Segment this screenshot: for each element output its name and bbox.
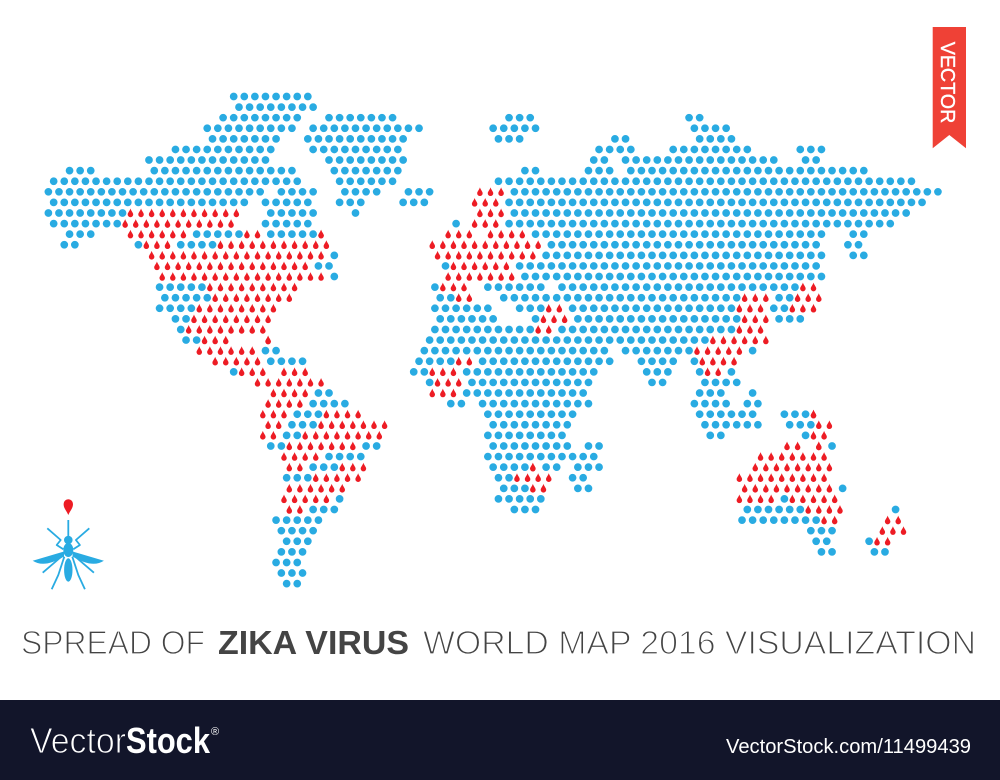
title: WORLD MAP 2016 VISUALIZATION [423,624,976,661]
landmass: Australia [739,414,844,552]
footer image id: VectorStock.com/11499439 [726,736,971,758]
landmass: southern Africa [488,414,600,510]
footer logo: Stock [126,720,211,761]
ribbon: vector badge: VECTOR [936,42,958,123]
footer logo: ® [211,726,219,738]
landmass: Greenland [308,118,431,213]
footer logo: Vector [30,720,126,761]
landmass: Iceland [493,118,537,139]
title [21,624,976,661]
landmass: New Zealand [869,510,904,552]
ribbon: vector badge [933,27,966,148]
title: SPREAD OF [21,624,205,661]
landmass: North America [48,96,335,372]
dotted world map [48,96,939,584]
landmass: South America [258,382,385,584]
landmass: Europe and Asia [414,118,939,435]
icon: mosquito with red drop [33,499,104,589]
footer bar [0,700,1000,780]
footer logo [30,720,219,761]
title: ZIKA VIRUS [218,624,409,661]
